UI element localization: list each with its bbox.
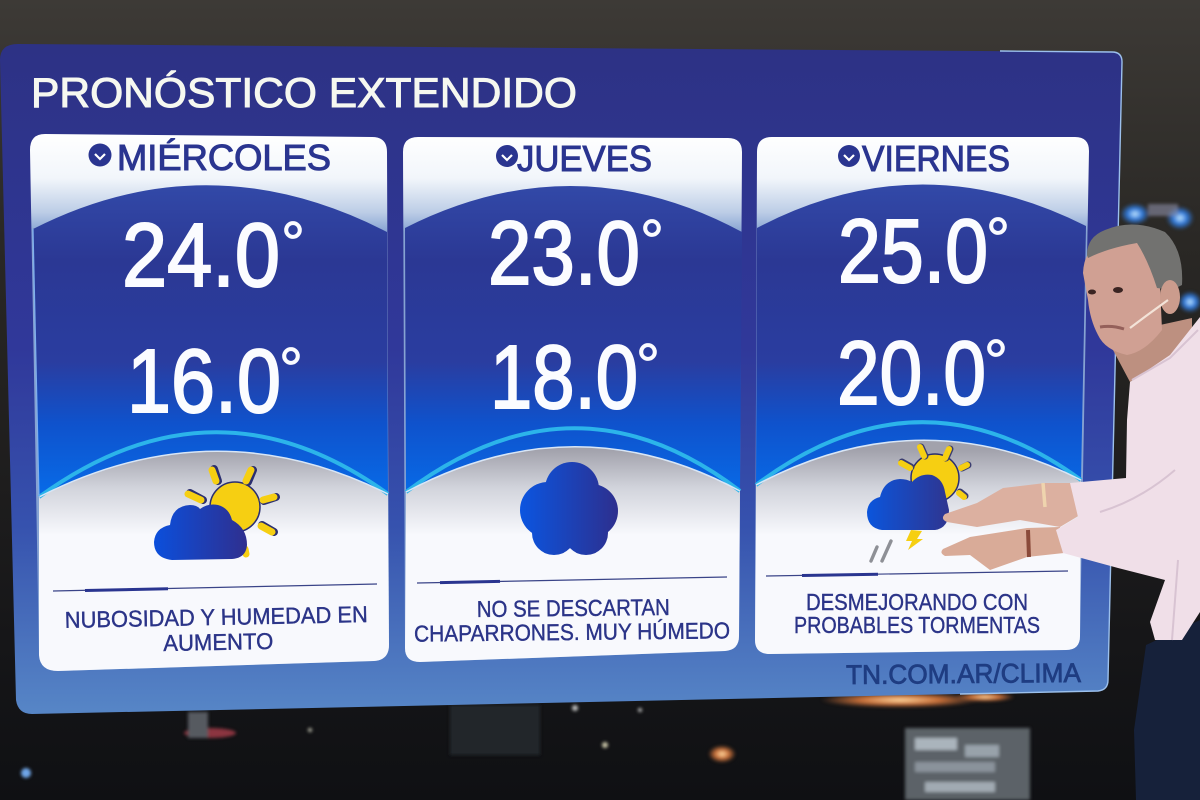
max temperature: 23.0: [488, 204, 640, 304]
neck: [1113, 318, 1192, 382]
description: AUMENTO: [163, 628, 273, 656]
description: [414, 593, 730, 647]
description: PROBABLES TORMENTAS: [794, 612, 1040, 638]
max temperature: 25.0: [838, 202, 988, 302]
max temperature: °: [640, 208, 664, 275]
card: miércoles: [30, 134, 389, 671]
divider: [417, 577, 727, 583]
description: [794, 589, 1040, 638]
max temperature: °: [986, 206, 1010, 273]
card: viernes: [755, 137, 1089, 654]
description: DESMEJORANDO CON: [806, 589, 1028, 615]
min temperature: °: [636, 332, 660, 399]
max temperature: °: [281, 210, 305, 277]
icon: storm cloud with sun: [867, 447, 968, 561]
trousers: [1134, 620, 1200, 800]
wristbands: [1028, 483, 1045, 557]
min temperature: °: [984, 328, 1008, 395]
day heading: JUEVES: [517, 138, 652, 179]
card: jueves: [403, 137, 742, 662]
forecast panel: [0, 44, 1122, 714]
max temperature: 24.0: [122, 206, 280, 306]
description: CHAPARRONES. MUY HÚMEDO: [414, 617, 730, 647]
shirt: [1056, 317, 1200, 640]
head: [1083, 224, 1182, 355]
day heading: MIÉRCOLES: [117, 137, 331, 178]
divider: [766, 571, 1068, 576]
min temperature: 18.0: [490, 328, 638, 428]
min temperature: 16.0: [127, 332, 281, 432]
upper hand: [943, 483, 1080, 527]
min temperature: °: [279, 336, 303, 403]
lower hand: [941, 527, 1064, 570]
presenter: [941, 224, 1200, 800]
divider: [53, 584, 377, 591]
description: NO SE DESCARTAN: [477, 594, 670, 622]
shirt folds: [1100, 330, 1198, 640]
min temperature: 20.0: [837, 324, 986, 424]
icon: cloud: [520, 462, 618, 555]
title: PRONÓSTICO EXTENDIDO: [31, 69, 577, 116]
description: NUBOSIDAD Y HUMEDAD EN: [65, 601, 368, 633]
description: [65, 601, 368, 658]
day heading: VIERNES: [862, 138, 1010, 179]
icon: sun behind cloud: [154, 469, 276, 560]
source url: TN.COM.AR/CLIMA: [846, 658, 1081, 690]
